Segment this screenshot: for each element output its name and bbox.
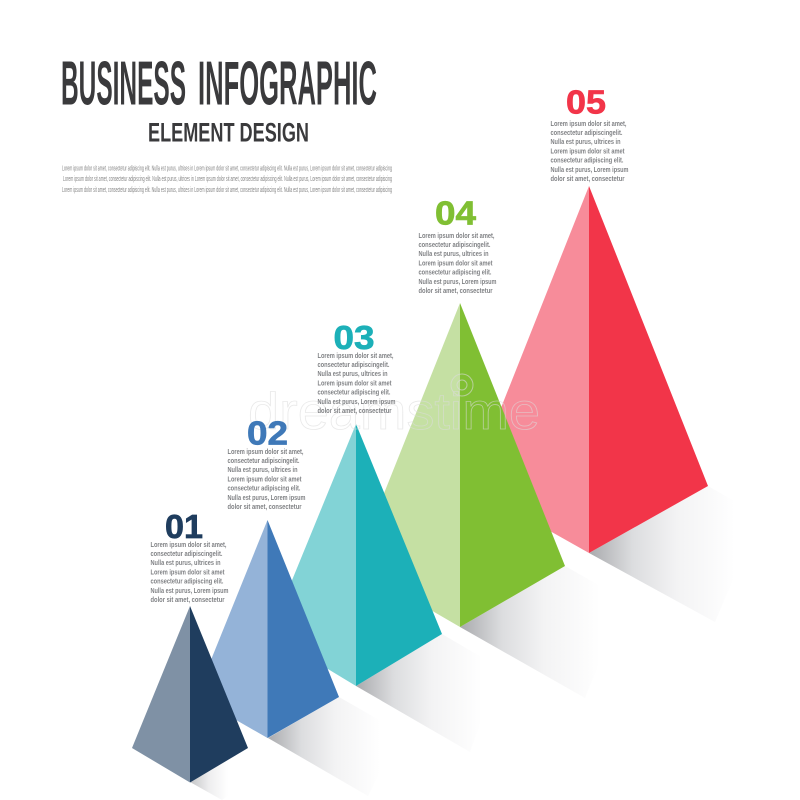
text 02: dolor sit amet, consectetur — [228, 502, 302, 511]
text 01: Lorem ipsum dolor sit amet — [150, 567, 225, 576]
text 02: Lorem ipsum dolor sit amet — [228, 474, 302, 483]
text 03: Nulla est purus, Lorem ipsum — [318, 397, 396, 406]
text 05: Nulla est purus, ultrices in — [550, 137, 621, 146]
text 02: consectetur adipiscingelit. — [228, 456, 300, 465]
shadow 2 — [268, 697, 400, 796]
text 01: Lorem ipsum dolor sit amet, — [150, 540, 226, 549]
step 03 label — [318, 320, 396, 415]
infographic canvas: Lorem ipsum dolor sit amet, consectetur adipiscing elit. Nulla est purus, ultrices in Lorem ipsum dolor sit amet, consectetur adipiscing elit. Nulla est purus, Lorem ipsum dolor sit amet, consectetur adipiscing — [62, 185, 392, 194]
text 05: consectetur adipiscing elit. — [550, 156, 624, 165]
text 01: Nulla est purus, Lorem ipsum — [150, 586, 229, 595]
text 03: consectetur adipiscingelit. — [318, 360, 390, 369]
pyramid 5 — [470, 186, 708, 553]
text 04: consectetur adipiscingelit. — [418, 240, 490, 249]
infographic canvas: Lorem ipsum dolor sit amet, consectetur adipiscing elit. Nulla est purus, ultrices in Lorem ipsum dolor sit amet, consectetur adipiscing elit. Nulla est purus, Lorem ipsum dolor sit amet, consectetur adipiscing — [63, 174, 392, 183]
infographic canvas: Lorem ipsum dolor sit amet, consectetur adipiscing elit. Nulla est purus, ultrices in Lorem ipsum dolor sit amet, consectetur adipiscing elit. Nulla est purus, Lorem ipsum dolor sit amet, consectetur adipiscing — [62, 164, 392, 172]
subtitle: ELEMENT DESIGN — [148, 118, 309, 148]
text 01 — [150, 540, 229, 604]
text 03: consectetur adipiscing elit. — [318, 388, 390, 397]
watermark: dreamstime — [248, 383, 540, 441]
title: BUSINESS — [61, 50, 186, 118]
text 05: Nulla est purus, Lorem ipsum — [550, 165, 629, 174]
infographic canvas: INFOGRAPHIC — [198, 50, 377, 118]
pyramid 1 — [132, 606, 248, 782]
pyramid 4 — [355, 303, 565, 627]
text 03: Lorem ipsum dolor sit amet — [318, 378, 392, 387]
text 03: dolor sit amet, consectetur — [318, 406, 392, 415]
step 05 label — [550, 84, 629, 183]
text 04: Nulla est purus, ultrices in — [418, 249, 489, 258]
text 04: dolor sit amet, consectetur — [418, 286, 493, 295]
intro paragraph — [62, 164, 392, 194]
shadow 4 — [460, 566, 625, 698]
step 02 label — [228, 416, 306, 511]
text 04: consectetur adipiscing elit. — [418, 268, 492, 277]
text 01: consectetur adipiscing elit. — [150, 577, 224, 586]
text 05 — [550, 119, 629, 183]
text 05: Lorem ipsum dolor sit amet, — [550, 119, 626, 128]
text 04: Lorem ipsum dolor sit amet, — [418, 231, 494, 240]
text 01: dolor sit amet, consectetur — [150, 595, 225, 604]
text 01: consectetur adipiscingelit. — [150, 549, 222, 558]
text 04: Lorem ipsum dolor sit amet — [418, 258, 493, 267]
step 01 label — [150, 509, 229, 604]
text 02: consectetur adipiscing elit. — [228, 484, 300, 493]
pyramid 2 — [196, 520, 339, 738]
text 03: Nulla est purus, ultrices in — [318, 369, 388, 378]
step 04 label — [418, 196, 497, 295]
shadow 3 — [356, 634, 500, 752]
text 02: Nulla est purus, Lorem ipsum — [228, 493, 306, 502]
text 05: dolor sit amet, consectetur — [550, 174, 625, 183]
pyramid 3 — [270, 424, 442, 686]
text 03 — [318, 351, 396, 415]
number 02: 02 — [247, 416, 288, 452]
text 01: Nulla est purus, ultrices in — [150, 558, 221, 567]
text 05: Lorem ipsum dolor sit amet — [550, 146, 625, 155]
text 04: Nulla est purus, Lorem ipsum — [418, 277, 497, 286]
text 02 — [228, 447, 306, 511]
shadow 5 — [589, 486, 760, 622]
text 05: consectetur adipiscingelit. — [550, 128, 622, 137]
number 05: 05 — [566, 84, 606, 122]
number 01: 01 — [165, 509, 203, 546]
text 04 — [418, 231, 497, 295]
text 02: Nulla est purus, ultrices in — [228, 465, 298, 474]
text 02: Lorem ipsum dolor sit amet, — [228, 447, 304, 456]
text 03: Lorem ipsum dolor sit amet, — [318, 351, 394, 360]
shadow 1 — [190, 748, 260, 800]
number 03: 03 — [334, 320, 374, 357]
number 04: 04 — [435, 196, 476, 232]
